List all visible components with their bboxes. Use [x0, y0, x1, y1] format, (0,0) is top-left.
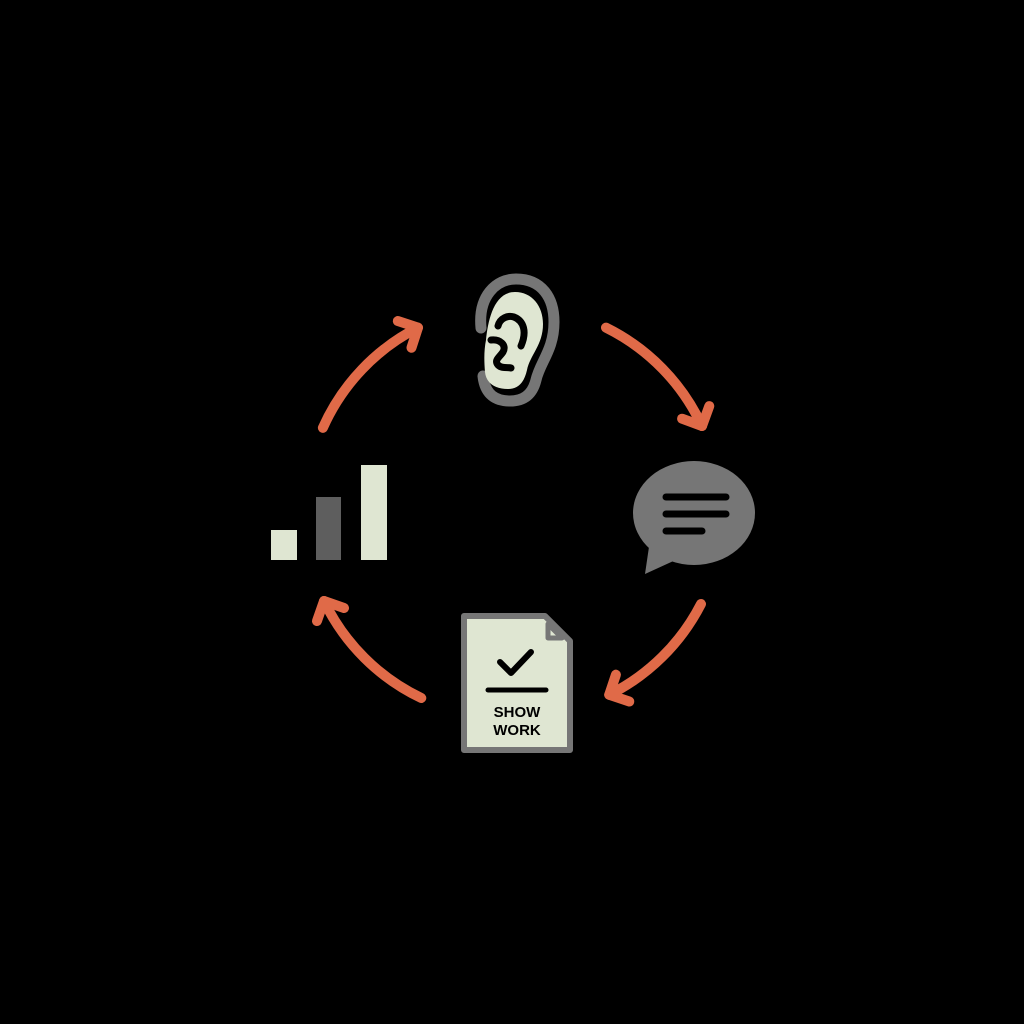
arrow: document to chart	[324, 601, 421, 698]
icon: speech bubble	[633, 461, 755, 574]
arrow: ear to speech	[606, 328, 702, 426]
icon: ear	[481, 279, 554, 401]
arrow: chart to ear	[323, 328, 418, 428]
icon: show work document: WORK	[493, 722, 541, 739]
label: show work: SHOW	[494, 704, 541, 721]
arrow: speech to document	[609, 604, 701, 695]
icon: show work document	[464, 616, 570, 750]
icon: bar chart	[271, 465, 387, 560]
